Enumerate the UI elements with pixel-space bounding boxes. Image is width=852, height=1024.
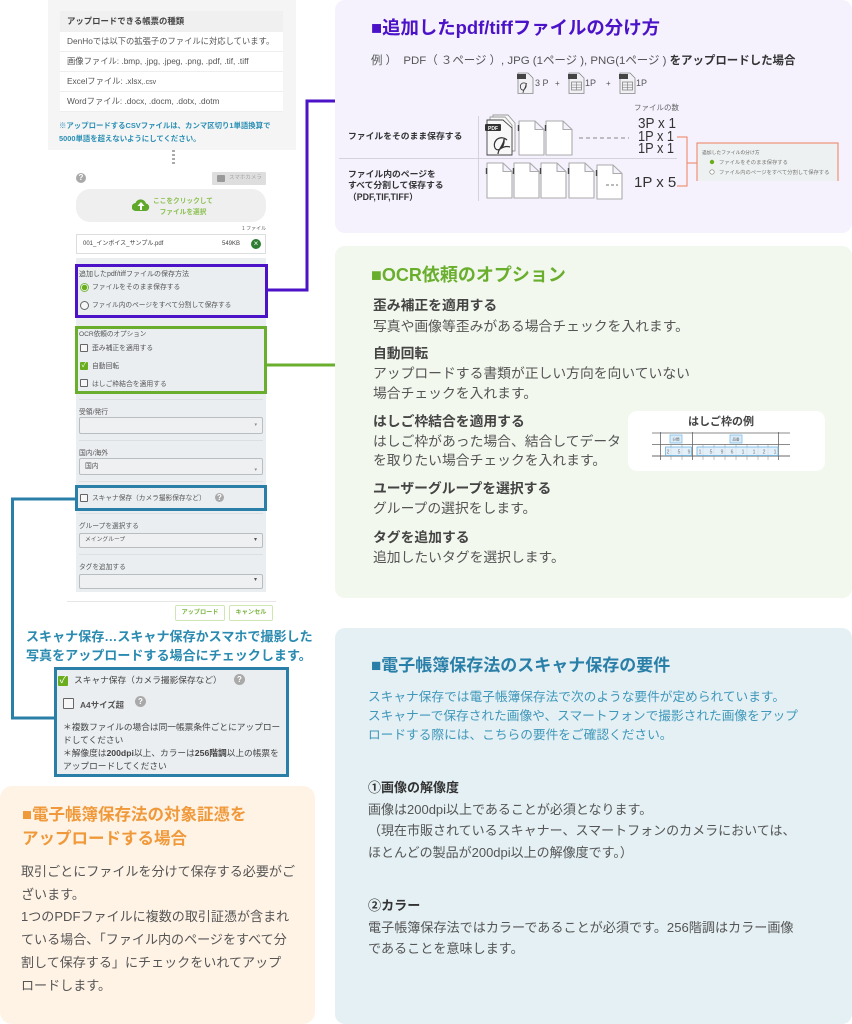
- button: smartphone camera: [212, 172, 266, 185]
- option: deskew: [373, 298, 689, 334]
- notes: ＊解像度は200dpi以上、カラーは256階調以上の帳票を: [63, 748, 279, 758]
- requirement 1: resolution: ①画像の解像度: [368, 780, 459, 795]
- select: tags: ▾: [254, 577, 257, 583]
- panel: electronic ledger documents: [0, 786, 315, 1024]
- heading: ■電子帳簿保存法の対象証憑を: [22, 806, 246, 824]
- radio off: [80, 301, 89, 310]
- table row: excel files: Excelファイル: .xlsx,.csv: [67, 76, 156, 86]
- mini option panel: 追加したファイルの分け方: [702, 149, 760, 156]
- panel: scanner save requirements: [335, 628, 852, 1024]
- radio on: [80, 283, 89, 292]
- OCR heading: OCR依頼のオプション: [79, 331, 146, 338]
- save method heading: 追加したpdf/tiffファイルの保存方法: [79, 271, 189, 278]
- file count heading: ファイルの数: [634, 102, 679, 112]
- scanner explanation: [26, 629, 313, 662]
- option: user group: ユーザーグループを選択する: [373, 481, 551, 496]
- help icon: ?: [79, 173, 83, 182]
- help icon: [234, 674, 245, 685]
- option: auto rotate: 場合チェックを入れます。: [373, 386, 537, 401]
- ellipsis dots: [172, 150, 175, 165]
- ladder chart: 9: [688, 450, 691, 456]
- dashes: [606, 184, 618, 186]
- select: tags: [79, 574, 263, 589]
- body text: ざいます。: [21, 887, 85, 902]
- scanner label: スキャナ保存（カメラ撮影保存など）: [92, 495, 206, 502]
- option: ladder merge: はしご枠があった場合、結合してデータ: [373, 434, 621, 448]
- option: ladder merge: [373, 414, 621, 468]
- select: received/issued: [79, 417, 263, 434]
- note: CSV limit: 5000単語を超えないようにしてください。: [59, 134, 200, 142]
- help icon: ?: [237, 675, 242, 684]
- intro text: スキャナ保存では電子帳簿保存法で次のような要件が定められています。: [368, 690, 785, 704]
- icon: upload cloud: [132, 199, 150, 211]
- table row: image files: [60, 52, 283, 72]
- select: group: ▾: [254, 537, 257, 543]
- table heading: [60, 11, 283, 32]
- scanner label: スキャナ保存（カメラ撮影保存など）: [74, 675, 222, 685]
- file name: 001_インボイス_サンプル.pdf: [83, 241, 163, 247]
- table row: intro: [60, 32, 283, 52]
- body text: ロードします。: [21, 978, 111, 993]
- checkbox A4: [63, 698, 74, 709]
- A4 label: A4サイズ超: [80, 700, 124, 710]
- button: upload: アップロード: [181, 609, 219, 616]
- ladder chart: 1: [774, 450, 777, 456]
- scanner explanation: スキャナ保存…スキャナ保存かスマホで撮影した: [26, 629, 313, 644]
- page binding tabs: [486, 125, 596, 176]
- row label: split pages: （PDF,TIF,TIFF）: [348, 192, 418, 202]
- intro text: スキャナーで保存された画像や、スマートフォンで撮影された画像をアップ: [368, 709, 798, 723]
- upload label: ファイルを選択: [160, 209, 206, 216]
- icon: remove file: [251, 239, 261, 249]
- arrow: green connector: [267, 364, 335, 366]
- requirement 1: resolution: 画像は200dpi以上であることが必須となります。: [368, 802, 652, 817]
- file counts: 1P x 1: [638, 128, 674, 145]
- body text: 1つのPDFファイルに複数の取引証憑が含まれ: [21, 909, 289, 924]
- option: auto rotate: 自動回転: [373, 346, 428, 361]
- icon: remove file: ×: [254, 239, 258, 248]
- label: はしご枠結合を適用する: [92, 380, 167, 388]
- table heading: アップロードできる帳票の種類: [67, 16, 184, 26]
- requirement 2: colour: であることを意味します。: [368, 941, 524, 956]
- body text: ている場合、「ファイル内のページをすべて分: [21, 932, 287, 947]
- row label: split pages: すべて分割して保存する: [348, 179, 444, 190]
- label: 歪み補正を適用する: [92, 345, 153, 352]
- ladder chart: 1: [753, 450, 756, 456]
- checkbox checked: [58, 676, 68, 686]
- camera label: スマホカメラ: [229, 175, 262, 181]
- intro text: ロードする際には、こちらの要件をご確認ください。: [368, 728, 672, 742]
- table row: word files: [60, 92, 283, 112]
- field label: tags: タグを追加する: [79, 564, 126, 571]
- icon: pdf 3P: [517, 73, 560, 94]
- help icon: [215, 493, 224, 502]
- ladder chart: 分類: [672, 436, 680, 442]
- row label: keep file: ファイルをそのまま保存する: [348, 130, 462, 141]
- option: user group: グループの選択をします。: [373, 501, 536, 516]
- requirement 2: colour: [368, 898, 794, 956]
- notes: アップロードしてください: [63, 761, 167, 771]
- button: upload: [175, 605, 225, 621]
- field label: domestic/overseas: 国内/海外: [79, 450, 108, 457]
- highlight: OCR options: [75, 326, 267, 394]
- panel: supported file types: [48, 0, 296, 150]
- stacked pdf icon: PDF: [488, 126, 498, 132]
- selected file row: [76, 234, 266, 254]
- option: tags: タグを追加する: [373, 530, 470, 545]
- file counts: [634, 115, 676, 191]
- icon: jpg 1P: [568, 73, 611, 94]
- option: deskew: 写真や画像等歪みがある場合チェックを入れます。: [373, 318, 689, 334]
- icon: jpg 1P: +: [606, 79, 611, 88]
- body text: 取引ごとにファイルを分けて保存する必要がご: [21, 864, 295, 879]
- ladder chart: 2: [763, 450, 766, 456]
- requirement 1: resolution: [368, 780, 795, 860]
- checkbox: [80, 344, 88, 352]
- notes: [63, 722, 280, 771]
- intro text: [368, 690, 798, 742]
- requirement 2: colour: ②カラー: [368, 898, 420, 913]
- orange bracket: [677, 137, 697, 186]
- example line: 例 ） PDF（ ３ページ ）, JPG (1ページ ), PNG(1ページ ) をアップロードした場合: [371, 54, 795, 66]
- ladder chart: 品番: [732, 436, 740, 442]
- help icon: [135, 696, 146, 707]
- select: group: [79, 533, 263, 548]
- ladder chart: 5: [678, 450, 681, 456]
- ladder chart: [652, 432, 790, 460]
- ladder chart: 9: [721, 450, 724, 456]
- field label: received/issued: 受領/発行: [79, 409, 108, 416]
- option: auto rotate: アップロードする書類が正しい方向を向いていない: [373, 366, 690, 381]
- table: file types: [60, 11, 283, 112]
- checkbox: [80, 494, 88, 502]
- option keep file: ファイルをそのまま保存する: [92, 284, 180, 291]
- option auto rotate: [80, 362, 119, 370]
- option deskew: [80, 344, 153, 352]
- help icon: ?: [217, 493, 222, 502]
- option ladder merge: [80, 379, 167, 388]
- option: tags: [373, 530, 565, 565]
- field label: group: グループを選択する: [79, 523, 139, 530]
- file counts: 1P x 5: [634, 174, 676, 191]
- checkbox checked: ✓: [82, 362, 86, 369]
- requirement 1: resolution: ほとんどの製品が200dpi以上の解像度です。）: [368, 845, 633, 860]
- arrow: blue connector: [12, 499, 75, 718]
- label: 自動回転: [92, 363, 119, 370]
- checkbox: [80, 379, 88, 387]
- stacked pdf icon: [485, 115, 515, 155]
- ladder chart: 1: [699, 450, 702, 456]
- panel: OCR options: [335, 246, 852, 598]
- select: received/issued: ▾: [254, 422, 257, 428]
- table row: excel files: [60, 72, 283, 92]
- select: domestic/overseas: ▾: [254, 467, 257, 473]
- option: user group: [373, 481, 551, 516]
- mini option panel: [697, 143, 838, 181]
- requirement 1: resolution: （現在市販されているスキャナー、スマートフォンのカメラにおいては、: [368, 823, 795, 838]
- example title: はしご枠の例: [688, 416, 754, 428]
- option: ladder merge: を取りたい場合チェックを入れます。: [373, 453, 606, 468]
- icon: png 1P: 1P: [636, 78, 647, 88]
- icon: png 1P: [619, 73, 647, 94]
- button: cancel: [229, 605, 273, 621]
- form background: [76, 258, 266, 592]
- table row: word files: Wordファイル: .docx, .docm, .dotx, .dotm: [67, 96, 219, 106]
- row label: split pages: ファイル内のページを: [348, 168, 436, 179]
- icon: jpg 1P: 1P: [585, 78, 596, 88]
- ladder chart: 2: [667, 450, 670, 456]
- heading: ■OCR依頼のオプション: [371, 265, 566, 285]
- heading: [22, 806, 246, 848]
- ladder chart: 1: [742, 450, 745, 456]
- body text: [21, 864, 295, 993]
- ladder chart: 6: [731, 450, 734, 456]
- icon: pdf 3P: +: [555, 79, 560, 88]
- select: domestic/overseas: [79, 458, 263, 475]
- file counts: 3P x 1: [638, 115, 676, 132]
- checkbox checked: [80, 362, 88, 370]
- note: CSV limit: [59, 121, 270, 142]
- option: deskew: 歪み補正を適用する: [373, 298, 497, 313]
- note: CSV limit: ※アップロードするCSVファイルは、カンマ区切り1単語換算で: [59, 121, 270, 130]
- checkbox checked: ✓: [60, 675, 66, 686]
- notes: ドしてください: [63, 735, 123, 745]
- upload label: [153, 197, 213, 216]
- requirement 2: colour: 電子帳簿保存法ではカラーであることが必須です。256階調はカラー画像: [368, 920, 794, 934]
- panel: how to split pdf/tiff: [335, 0, 852, 233]
- notes: ＊複数ファイルの場合は同一帳票条件ごとにアップロー: [63, 722, 280, 732]
- table row: intro: DenHoでは以下の拡張子のファイルに対応しています。: [67, 36, 274, 46]
- table row: image files: 画像ファイル: .bmp, .jpg, .jpeg, .png, .pdf, .tif, .tiff: [67, 56, 249, 66]
- single page icons: [487, 121, 622, 199]
- upload drop zone: [76, 189, 266, 222]
- file count: 1 ファイル: [242, 226, 266, 232]
- heading: ■電子帳簿保存法のスキャナ保存の要件: [371, 656, 670, 675]
- icon: camera: [217, 175, 225, 182]
- file counts: 1P x 1: [638, 140, 674, 157]
- comparison table rules: [339, 116, 677, 201]
- row label: split pages: [348, 168, 444, 202]
- body text: 割して保存する」にチェックをいれてアップ: [21, 955, 281, 970]
- option: ladder merge: はしご枠結合を適用する: [373, 414, 525, 429]
- button: cancel: キャンセル: [236, 609, 266, 616]
- option: tags: 追加したいタグを選択します。: [373, 550, 565, 565]
- option split pages: ファイル内のページをすべて分割して保存する: [92, 302, 231, 309]
- select: group: メイングループ: [85, 537, 125, 543]
- ladder chart: 5: [710, 450, 713, 456]
- heading: ■追加したpdf/tiffファイルの分け方: [371, 17, 660, 38]
- help icon: [76, 173, 86, 183]
- help icon: ?: [138, 697, 143, 706]
- arrow: purple connector: [268, 101, 335, 290]
- highlight: scanner save: [75, 485, 267, 511]
- upload label: ここをクリックして: [153, 198, 213, 205]
- scanner explanation: 写真をアップロードする場合にチェックします。: [26, 648, 312, 662]
- example file icons: [339, 72, 838, 202]
- mini option panel: ファイルをそのまま保存する: [719, 158, 788, 166]
- highlight: save method: [75, 264, 268, 318]
- option: auto rotate: [373, 346, 690, 401]
- select: domestic/overseas: 国内: [85, 463, 99, 470]
- icon: pdf 3P: 3 P: [535, 78, 549, 88]
- panel: scanner options detail: [54, 667, 289, 777]
- ladder frame example: [628, 411, 825, 471]
- heading: アップロードする場合: [22, 830, 187, 848]
- mini option panel: ファイル内のページをすべて分割して保存する: [719, 168, 829, 176]
- file size: 549KB: [222, 241, 240, 247]
